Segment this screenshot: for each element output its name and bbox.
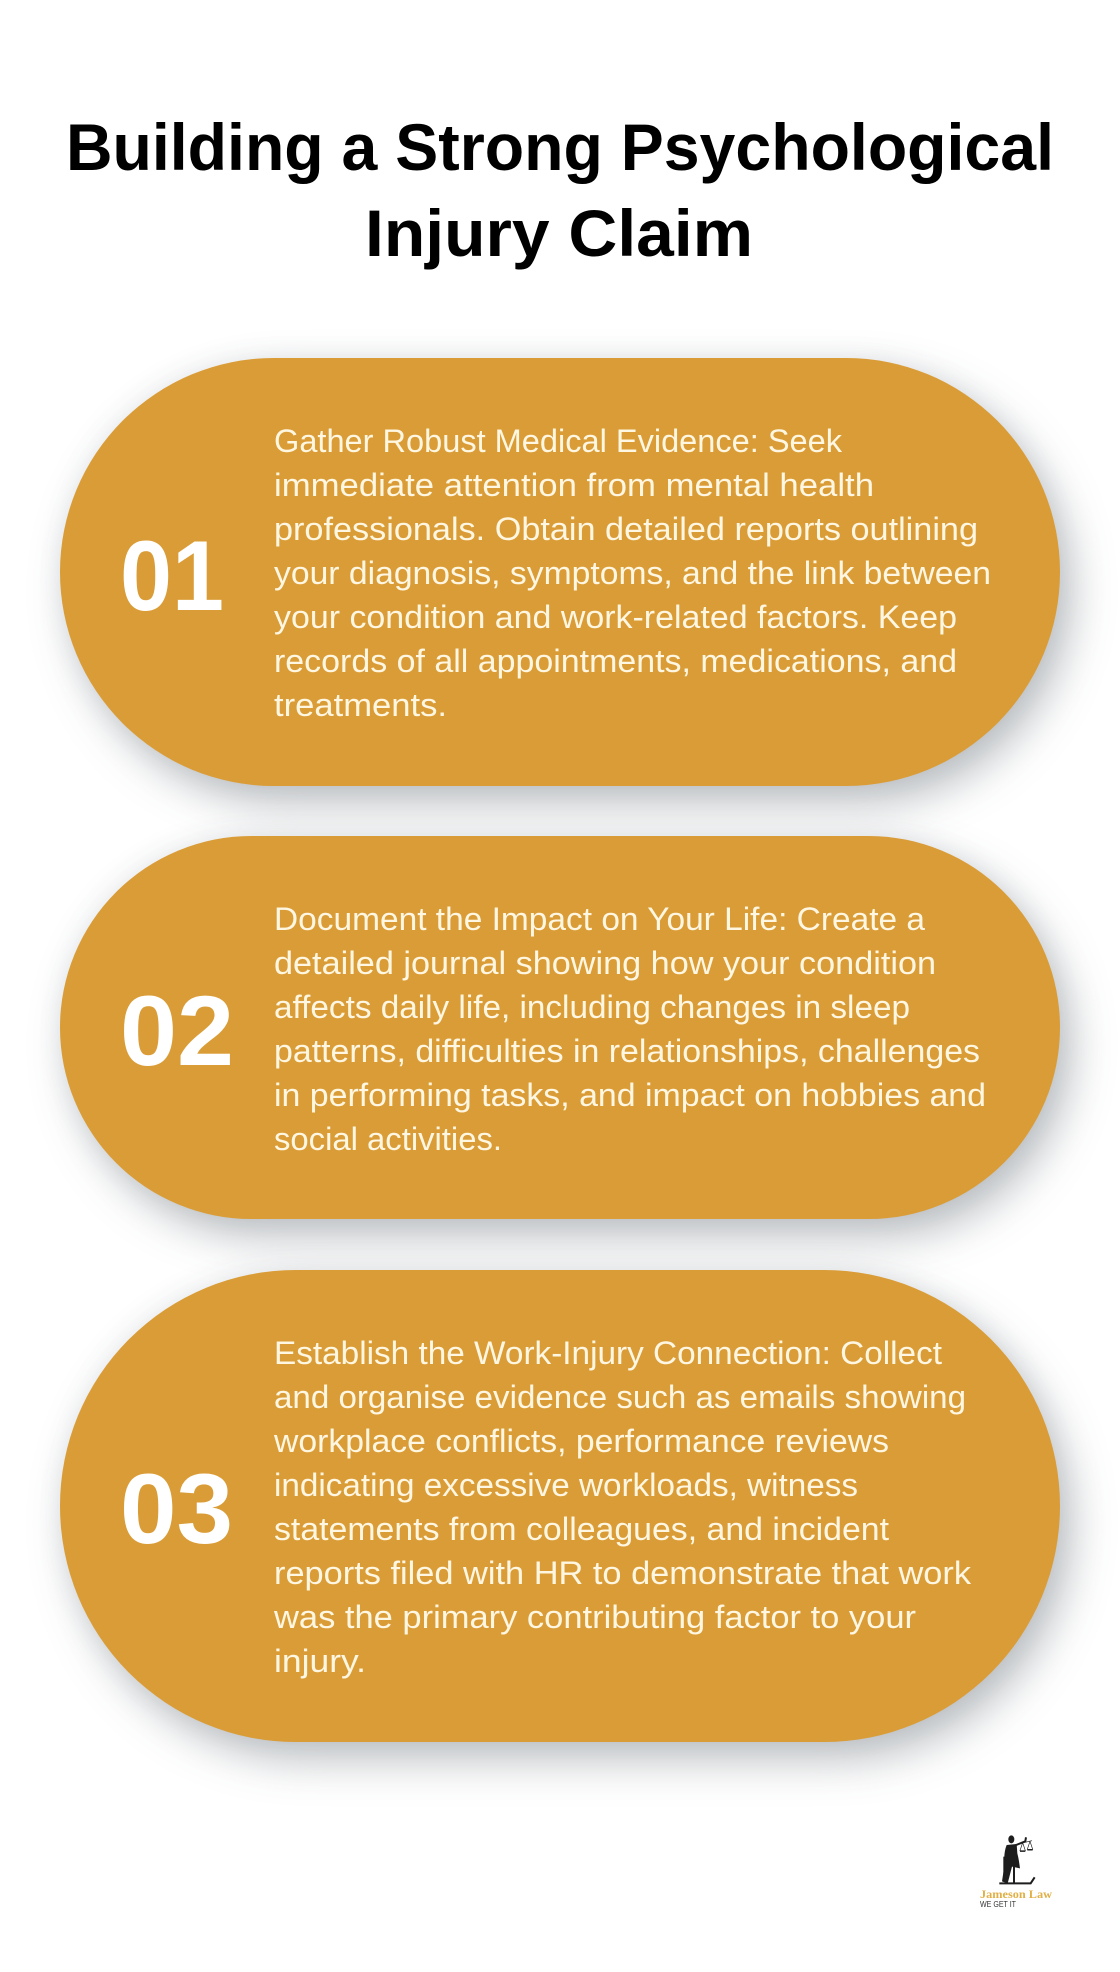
text block: step 02: Document the Impact on Your Life: Create a xyxy=(274,901,925,937)
text block: step 02: detailed journal showing how your condition xyxy=(274,945,936,981)
title xyxy=(66,110,1054,270)
panel: step 02 impact on life xyxy=(60,836,1060,1219)
text block: step 02: in performing tasks, and impact on hobbies and xyxy=(274,1077,986,1113)
logo tagline: WE GET IT xyxy=(980,1900,1016,1909)
panel: step 03 work-injury connection xyxy=(60,1270,1060,1742)
text block: step 03: and organise evidence such as emails showing xyxy=(274,1379,966,1415)
text block: step 03: Establish the Work-Injury Connection: Collect xyxy=(274,1335,942,1371)
text block: step 03: reports filed with HR to demonstrate that work xyxy=(274,1555,972,1591)
text block: step 01 xyxy=(274,423,991,723)
text block: step 01: records of all appointments, medications, and xyxy=(274,643,957,679)
title: Building a Strong Psychological xyxy=(66,110,1054,184)
text block: step 01: Gather Robust Medical Evidence: Seek xyxy=(274,423,843,459)
text block: step 01: your diagnosis, symptoms, and the link between xyxy=(274,555,991,591)
text block: step 03: workplace conflicts, performance reviews xyxy=(273,1423,889,1459)
title: Injury Claim xyxy=(365,196,753,270)
logo: Jameson Law xyxy=(980,1835,1053,1909)
number 03: 03 xyxy=(120,1453,233,1564)
text block: step 01: your condition and work-related factors. Keep xyxy=(274,599,957,635)
text block: step 01: immediate attention from mental health xyxy=(274,467,874,503)
text block: step 02 xyxy=(274,901,986,1157)
text block: step 02: affects daily life, including changes in sleep xyxy=(274,989,910,1025)
text block: step 02: patterns, difficulties in relationships, challenges xyxy=(274,1033,980,1069)
text block: step 03: was the primary contributing factor to your xyxy=(273,1599,916,1635)
number 02: 02 xyxy=(120,975,234,1086)
text block: step 02: social activities. xyxy=(274,1121,502,1157)
text block: step 03: statements from colleagues, and incident xyxy=(274,1511,889,1547)
text block: step 03: injury. xyxy=(274,1643,366,1679)
panel: step 01 medical evidence xyxy=(60,358,1060,786)
text block: step 01: treatments. xyxy=(274,687,447,723)
text block: step 01: professionals. Obtain detailed reports outlining xyxy=(274,511,978,547)
number 01: 01 xyxy=(120,520,224,631)
logo wordmark: Jameson Law xyxy=(980,1889,1053,1901)
text block: step 03: indicating excessive workloads, witness xyxy=(274,1467,858,1503)
text block: step 03 xyxy=(273,1335,972,1679)
icon: lady justice with L xyxy=(999,1835,1035,1883)
